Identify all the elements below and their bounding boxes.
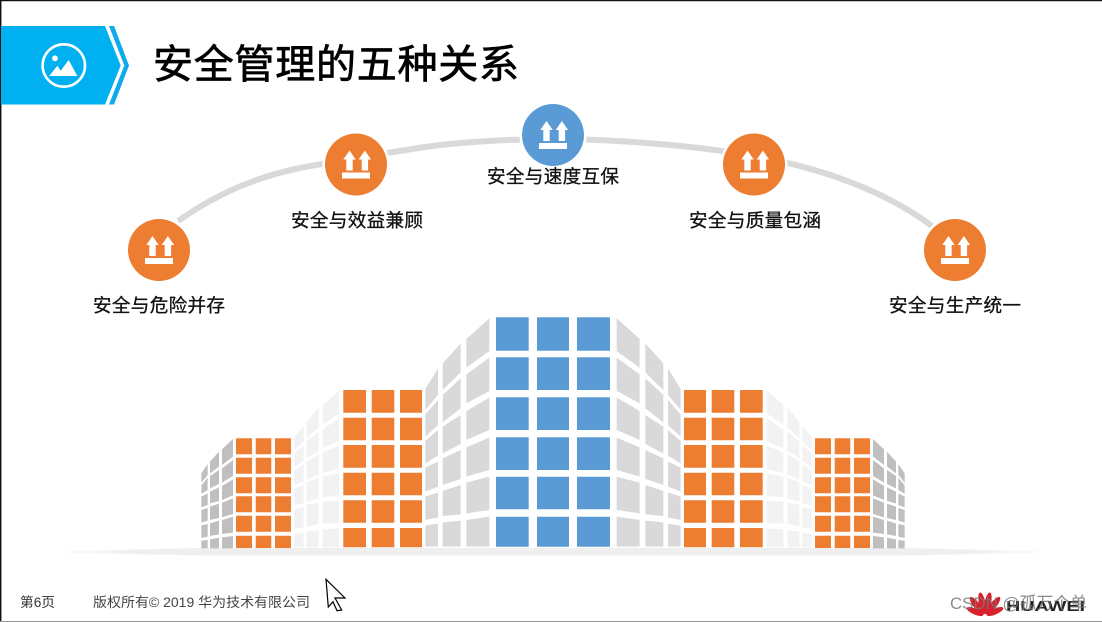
label: 安全与质量包涵: 安全与质量包涵: [689, 210, 821, 231]
node: 安全与速度互保: [520, 102, 586, 168]
huawei logo: HUAWEI: [1006, 598, 1085, 615]
title: 安全管理的五种关系: [153, 43, 519, 87]
node: 安全与危险并存: [126, 216, 192, 284]
node: 安全与质量包涵: [720, 131, 788, 198]
node: 安全与效益兼顾: [322, 131, 390, 198]
left half of the building: [201, 318, 489, 548]
footer copyright: 版权所有© 2019 华为技术有限公司: [93, 594, 310, 610]
arc connecting the nodes: [178, 139, 932, 226]
label: 安全与危险并存: 安全与危险并存: [93, 295, 225, 316]
label: 安全与效益兼顾: 安全与效益兼顾: [291, 210, 423, 231]
huawei logo: [966, 592, 1085, 618]
csdn watermark: CSDN @孤万个单: [950, 594, 1087, 613]
ground shadow: [35, 548, 1070, 556]
medium orange facade: [343, 390, 422, 547]
small orange facade: [236, 438, 291, 548]
label: 安全与速度互保: 安全与速度互保: [487, 166, 619, 187]
right half of the building (mirror): [617, 318, 905, 548]
node: 安全与生产统一: [922, 216, 988, 284]
label: 安全与生产统一: 安全与生产统一: [889, 295, 1021, 316]
central grey wing: [425, 318, 489, 547]
central blue facade: [496, 317, 610, 547]
header banner with image icon: [1, 26, 129, 104]
footer page number: 第6页: [20, 594, 55, 610]
outer grey wing: [201, 439, 233, 548]
light grey wing: [294, 391, 339, 547]
mouse cursor: [326, 579, 345, 611]
